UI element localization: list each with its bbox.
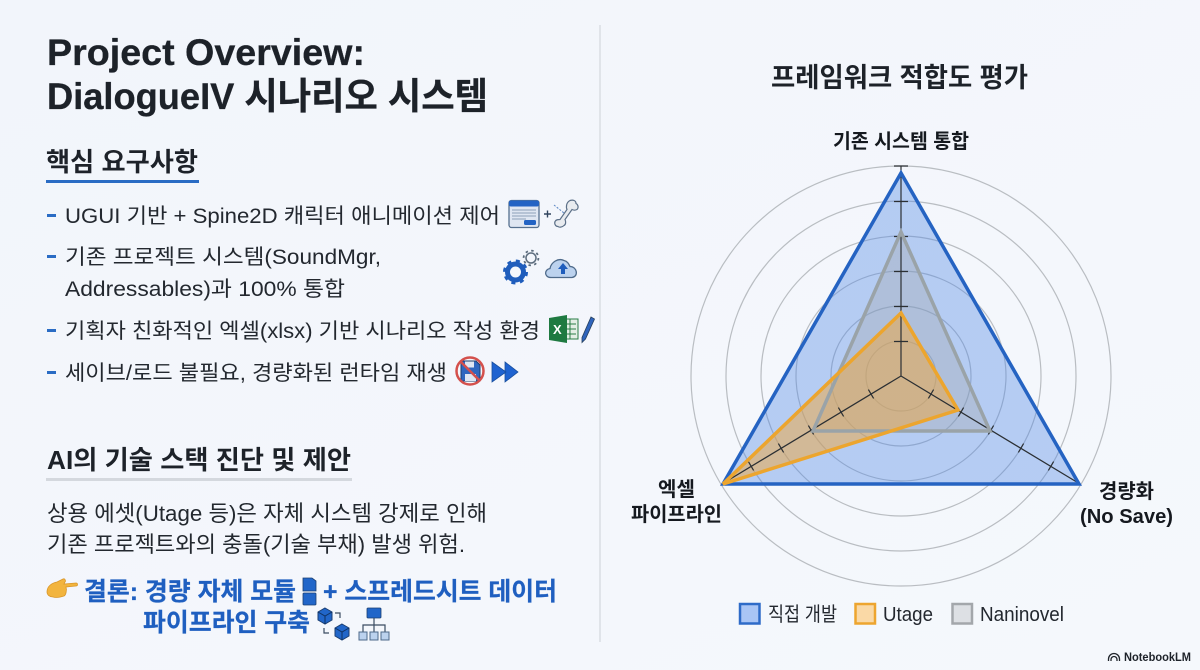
icon: hierarchy (359, 608, 389, 640)
diagnosis text: 상용 에셋(Utage 등)은 자체 시스템 강제로 인해 (47, 501, 487, 526)
requirement 2: 기존 프로젝트 시스템(SoundMgr, (65, 246, 381, 269)
icon: module (303, 578, 316, 605)
requirement 2: Addressables)과 100% 통합 (65, 278, 345, 301)
conclusion: 파이프라인 구축 (143, 609, 310, 637)
requirement 4: 세이브/로드 불필요, 경량화된 런타임 재생 (65, 362, 447, 385)
conclusion (84, 578, 557, 640)
axis label: top: 기존 시스템 통합 (833, 130, 969, 153)
legend item: 직접 개발 (740, 603, 837, 626)
axis label: left: 파이프라인 (631, 503, 722, 526)
series: Naninovel (813, 232, 990, 431)
icon: plus and bone (544, 200, 578, 227)
axis label: left: 엑셀 (658, 478, 695, 501)
heading: AI diagnosis: AI의 기술 스택 진단 및 제안 (47, 445, 351, 475)
series: 직접 개발 (723, 173, 1079, 484)
icon: gears (504, 251, 538, 283)
conclusion: + 스프레드시트 데이터 (323, 578, 557, 606)
axis label: left (631, 478, 722, 526)
title (47, 32, 488, 117)
legend item: Naninovel: Naninovel (980, 604, 1064, 626)
icon: no save (456, 358, 484, 384)
icon: fast forward (492, 362, 518, 382)
requirement 3: 기획자 친화적인 엑셀(xlsx) 기반 시나리오 작성 환경 (65, 320, 540, 343)
icon: pencil (582, 317, 594, 342)
diagnosis text (47, 501, 487, 557)
requirement 2 (47, 246, 381, 301)
axis label: right: (No Save) (1080, 506, 1173, 528)
series: Utage (723, 313, 958, 484)
legend item: 직접 개발: 직접 개발 (768, 603, 837, 626)
legend (740, 603, 1064, 626)
requirements list (47, 200, 594, 385)
heading: core requirements: 핵심 요구사항 (46, 147, 198, 177)
axis label: right: 경량화 (1099, 480, 1154, 503)
icon: excel: X (553, 322, 562, 337)
conclusion: 결론: 경량 자체 모듈 (84, 578, 296, 606)
icon: cubes (318, 608, 349, 640)
axis label: right (1080, 480, 1173, 528)
legend item: Utage: Utage (883, 604, 933, 626)
icon: pointing hand (47, 579, 78, 597)
legend item: Utage (856, 604, 933, 626)
radar chart (691, 166, 1111, 586)
watermark: NotebookLM: NotebookLM (1124, 650, 1191, 664)
title: DialogueIV 시나리오 시스템 (47, 76, 488, 117)
chart title: 프레임워크 적합도 평가 (771, 63, 1028, 93)
title: Project Overview: (47, 32, 365, 73)
icon: UI window (509, 200, 539, 228)
icon: cloud upload (546, 260, 576, 278)
diagnosis text: 기존 프로젝트와의 충돌(기술 부채) 발생 위험. (47, 532, 465, 557)
icon: excel (549, 315, 578, 343)
requirement 1: UGUI 기반 + Spine2D 캐릭터 애니메이션 제어 (65, 205, 500, 228)
